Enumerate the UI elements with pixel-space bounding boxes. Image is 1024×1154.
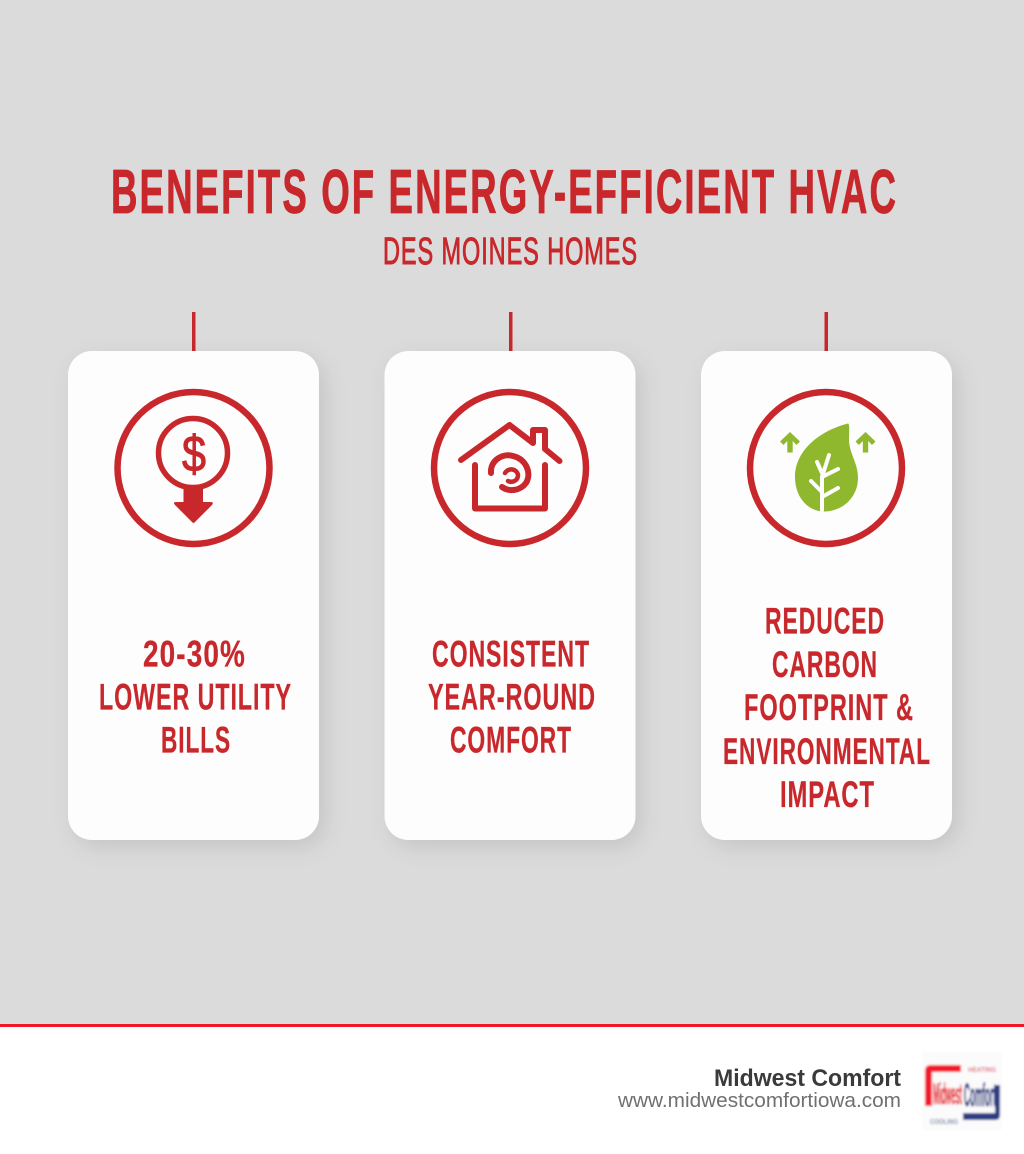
- text: year-round comfort: COMFORT: [450, 720, 572, 760]
- text: reduced carbon footprint: REDUCED: [765, 600, 885, 642]
- text: lower utility bills: LOWER UTILITY: [99, 676, 292, 718]
- panel: reduced carbon footprint: [701, 351, 952, 840]
- text: reduced carbon footprint: [723, 600, 931, 815]
- footer brand name: Midwest Comfort: [714, 1065, 901, 1092]
- logo: COOLING: [930, 1119, 958, 1126]
- icon: dollar with down arrow: $: [182, 425, 206, 482]
- text: reduced carbon footprint: IMPACT: [780, 774, 875, 815]
- footer url: www.midwestcomfortiowa.com: [617, 1090, 901, 1112]
- text: lower utility bills: BILLS: [161, 720, 231, 760]
- subtitle: DES MOINES HOMES: [383, 231, 638, 273]
- logo: [922, 1052, 1002, 1130]
- text: lower utility bills: [99, 634, 292, 760]
- icon: leaf with up arrows: [750, 392, 902, 544]
- icon: house with spiral: [434, 392, 586, 544]
- icon: dollar with down arrow: [118, 392, 270, 544]
- connector: card 1: [192, 312, 196, 352]
- text: year-round comfort: CONSISTENT: [432, 634, 590, 674]
- connector: card 3: [824, 312, 828, 352]
- logo: HEATING: [968, 1067, 996, 1074]
- text: reduced carbon footprint: CARBON: [772, 644, 878, 685]
- panel: year-round comfort: [384, 351, 636, 840]
- connector: card 2: [509, 312, 512, 352]
- text: year-round comfort: [428, 634, 596, 760]
- footer: [0, 1024, 1024, 1154]
- panel: lower utility bills: [68, 351, 319, 840]
- text: lower utility bills: 20-30%: [143, 634, 246, 674]
- text: reduced carbon footprint: FOOTPRINT &: [744, 687, 914, 728]
- text: year-round comfort: YEAR-ROUND: [428, 676, 596, 718]
